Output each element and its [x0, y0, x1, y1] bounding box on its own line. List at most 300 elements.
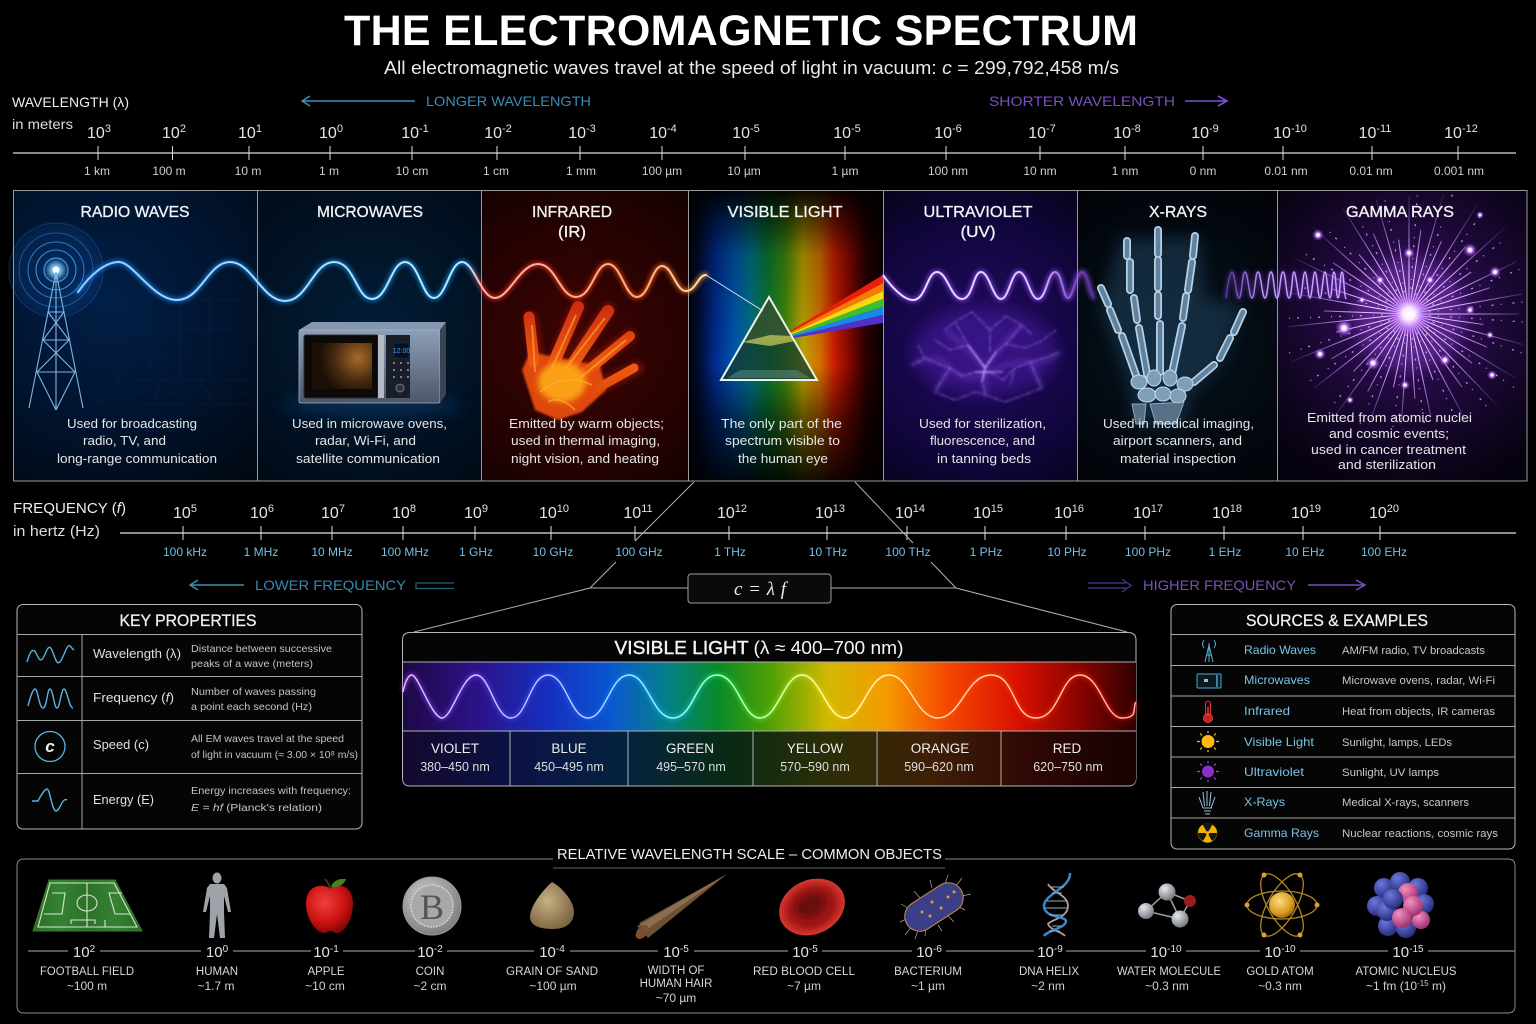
wavelength exponents: 10 — [1359, 125, 1376, 142]
object: human: ~1.7 m — [197, 979, 235, 993]
subtitle: All electromagnetic waves travel at the speed of light in vacuum: c = 299,792,458 m/s — [384, 58, 1119, 78]
row: wavelength: Distance between successive — [191, 643, 332, 655]
heading: SOURCES & EXAMPLES — [1246, 612, 1428, 630]
wavelength exponents: 0 — [337, 123, 343, 135]
row: ultraviolet — [1197, 761, 1440, 782]
wave: gamma rays — [1226, 272, 1346, 298]
row: frequency: Frequency ( f) — [93, 691, 174, 705]
icon: gamma burst — [1285, 192, 1534, 428]
object: bacterium: BACTERIUM — [894, 966, 962, 978]
spectrum band panels — [9, 190, 1534, 481]
frequency exponents: 13 — [833, 503, 845, 515]
frequency units — [163, 545, 1407, 559]
row: visible light — [1197, 731, 1453, 752]
frequency exponents: 10 — [464, 505, 482, 522]
object: DNA helix: DNA HELIX — [1019, 966, 1079, 978]
arrow: lower frequency — [190, 577, 454, 593]
object: red blood cell: -5 — [809, 944, 818, 955]
color range cells: 450–495 nm — [534, 760, 604, 774]
frequency units: 10 MHz — [311, 545, 353, 559]
object: football field: FOOTBALL FIELD — [40, 966, 134, 978]
heading: MICROWAVES — [317, 204, 423, 221]
object: bacterium — [894, 875, 971, 993]
icon: x-ray hand — [1101, 230, 1243, 425]
wavelength exponents: 10 — [484, 125, 502, 142]
frequency exponents: 10 — [557, 503, 569, 515]
panel: ultraviolet — [883, 190, 1077, 481]
row: gamma rays: Nuclear reactions, cosmic rays — [1342, 828, 1499, 840]
object: bacterium: 10 — [916, 944, 933, 961]
object: red blood cell — [753, 868, 856, 993]
wavelength exponents: 3 — [105, 123, 111, 135]
arrow: higher frequency — [1088, 577, 1365, 593]
object: coin — [403, 877, 461, 993]
panel: radio waves — [9, 190, 258, 481]
row: x-rays — [1199, 791, 1470, 814]
frequency axis label: in hertz (Hz) — [13, 524, 100, 540]
heading: ULTRAVIOLET — [924, 204, 1033, 221]
description: Used for broadcasting — [67, 416, 197, 431]
description: airport scanners, and — [1113, 433, 1242, 448]
description: long-range communication — [57, 451, 217, 466]
description: the human eye — [738, 451, 828, 466]
wavelength units: 1 µm — [832, 164, 858, 178]
row: energy: Energy (E) — [93, 793, 154, 807]
frequency axis label: FREQUENCY ( f) — [13, 501, 126, 517]
object: human hair — [633, 874, 727, 1005]
row: gamma rays — [1198, 823, 1499, 842]
row: microwaves: Microwaves — [1244, 673, 1310, 687]
frequency exponents: 10 — [815, 505, 833, 522]
panel: microwaves — [258, 190, 481, 481]
icon: prism — [706, 275, 817, 380]
frequency exponents: 16 — [1072, 503, 1084, 515]
row: wavelength — [27, 643, 332, 670]
wavelength units: 1 mm — [566, 164, 596, 178]
object: human hair: WIDTH OF — [648, 965, 704, 977]
wavelength units: 10 cm — [396, 164, 428, 178]
color range cells: GREEN — [666, 741, 714, 756]
wavelength units: 1 m — [319, 164, 339, 178]
wavelength exponents: -5 — [851, 123, 861, 135]
object: grain of sand: GRAIN OF SAND — [506, 966, 598, 978]
description: Used in medical imaging, — [1103, 416, 1254, 431]
icon: thermal hand — [522, 306, 637, 420]
row: radio waves: Radio Waves — [1244, 643, 1316, 657]
formula box — [688, 574, 831, 603]
wavelength units: 0.001 nm — [1434, 164, 1484, 178]
object: human: HUMAN — [196, 966, 238, 978]
wavelength axis label: WAVELENGTH (λ) — [12, 94, 129, 110]
heading: VISIBLE LIGHT — [728, 204, 843, 221]
color range cells: 590–620 nm — [904, 760, 974, 774]
frequency exponents: 10 — [173, 505, 191, 522]
frequency units: 100 PHz — [1125, 545, 1171, 559]
wavelength scale line — [13, 146, 1516, 160]
row: energy: Energy increases with frequency: — [191, 785, 351, 797]
object: coin: ~2 cm — [413, 979, 447, 993]
wavelength axis — [12, 93, 1516, 178]
wavelength exponents: -1 — [419, 123, 429, 135]
object: coin: B — [420, 887, 444, 927]
row: wavelength: Wavelength (λ) — [93, 647, 181, 661]
object: human: 0 — [223, 944, 229, 955]
row: frequency: Number of waves passing — [191, 686, 316, 698]
frequency exponents: 10 — [1212, 505, 1230, 522]
description: fluorescence, and — [930, 433, 1035, 448]
object: human — [196, 872, 238, 993]
wavelength exponents: 10 — [1113, 125, 1131, 142]
frequency exponents: 14 — [913, 503, 925, 515]
color range cells: 495–570 nm — [656, 760, 726, 774]
object: red blood cell: RED BLOOD CELL — [753, 966, 856, 978]
description: used in thermal imaging, — [511, 433, 660, 448]
description: and sterilization — [1338, 457, 1436, 472]
frequency units: 1 MHz — [244, 545, 278, 559]
panel outline and dividers — [14, 190, 1527, 481]
wavelength exponents: 10 — [833, 125, 851, 142]
object: football field: 10 — [73, 944, 90, 961]
object: red blood cell: ~7 µm — [787, 979, 821, 993]
wavelength exponents: 10 — [162, 125, 180, 142]
frequency exponents: 10 — [973, 505, 991, 522]
wavelength exponents: 10 — [649, 125, 667, 142]
frequency exponents: 10 — [717, 505, 735, 522]
wavelength units: 100 µm — [642, 164, 682, 178]
wavelength exponents: 10 — [934, 125, 952, 142]
frequency units: 1 THz — [714, 545, 746, 559]
object: atomic nucleus: 10 — [1392, 944, 1409, 961]
arrow: lower frequency: LOWER FREQUENCY — [255, 577, 407, 593]
frequency exponents: 8 — [410, 503, 416, 515]
object: DNA helix: -9 — [1054, 944, 1063, 955]
frequency exponents: 5 — [191, 503, 197, 515]
object: coin: -2 — [434, 944, 443, 955]
panel: relative wavelength scale — [17, 847, 1515, 1013]
frequency axis label — [13, 501, 126, 540]
description — [509, 416, 664, 466]
frequency exponents — [173, 503, 1399, 522]
frequency exponents: 10 — [895, 505, 913, 522]
row: frequency: a point each second (Hz) — [191, 701, 312, 713]
heading: X-RAYS — [1149, 204, 1207, 221]
icon: microwave oven — [299, 322, 446, 403]
description — [721, 416, 842, 466]
description: Used in microwave ovens, — [292, 416, 447, 431]
wavelength exponents: 10 — [1273, 125, 1291, 142]
row: speed: Speed (c) — [93, 738, 149, 752]
frequency units: 10 THz — [809, 545, 847, 559]
row: x-rays: Medical X-rays, scanners — [1342, 797, 1470, 809]
wavelength units: 1 cm — [483, 164, 509, 178]
description: night vision, and heating — [511, 451, 659, 466]
frequency exponents: 10 — [1133, 505, 1151, 522]
object: football field — [33, 880, 142, 993]
wavelength exponents: 10 — [401, 125, 419, 142]
object: human: 10 — [206, 944, 223, 961]
frequency units: 1 PHz — [970, 545, 1002, 559]
object: atomic nucleus: m) — [1429, 979, 1446, 993]
object: coin: 10 — [417, 944, 434, 961]
object: atomic nucleus: ATOMIC NUCLEUS — [1356, 966, 1457, 978]
description: Emitted by warm objects; — [509, 416, 664, 431]
icon: rainbow beam — [790, 275, 883, 338]
frequency exponents: 10 — [1369, 505, 1387, 522]
row: energy: E = hf (Planck's relation) — [191, 802, 322, 814]
heading: GAMMA RAYS — [1346, 204, 1454, 221]
frequency units: 100 GHz — [615, 545, 663, 559]
frequency units: 1 EHz — [1209, 545, 1241, 559]
wavelength exponents: -4 — [667, 123, 677, 135]
wavelength units: 100 nm — [928, 164, 968, 178]
color range cells: BLUE — [551, 741, 587, 756]
frequency exponents: 10 — [392, 505, 410, 522]
color range cells: VIOLET — [431, 741, 479, 756]
row: infrared: Heat from objects, IR cameras — [1342, 706, 1496, 718]
wavelength exponents: -7 — [1046, 123, 1056, 135]
icon: UV fluorescence pattern — [912, 308, 1060, 402]
wavelength exponents: -8 — [1131, 123, 1141, 135]
color range cells: RED — [1053, 741, 1081, 756]
row: ultraviolet: Ultraviolet — [1244, 765, 1305, 779]
row: infrared — [1204, 701, 1496, 722]
object: bacterium: -6 — [933, 944, 942, 955]
object: gold atom: 10 — [1264, 944, 1281, 961]
object: atomic nucleus: -15 — [1417, 979, 1429, 988]
description: in tanning beds — [937, 451, 1032, 466]
object: grain of sand: 10 — [539, 944, 556, 961]
frequency units: 1 GHz — [459, 545, 493, 559]
wavelength units: 10 m — [235, 164, 261, 178]
description: satellite communication — [296, 451, 440, 466]
row: energy — [32, 785, 351, 814]
object: apple — [305, 879, 353, 993]
object: apple: APPLE — [307, 966, 345, 978]
wavelength exponents: -12 — [1462, 123, 1478, 135]
object: atomic nucleus: -15 — [1409, 944, 1424, 955]
object: grain of sand — [506, 882, 598, 993]
arrow: longer wavelength: LONGER WAVELENGTH — [426, 93, 591, 109]
description: Used for sterilization, — [919, 416, 1046, 431]
wavelength units: 100 m — [152, 164, 186, 178]
zoom connector lines — [414, 482, 1127, 632]
wavelength axis label — [12, 94, 129, 132]
frequency exponents: 12 — [735, 503, 747, 515]
row: visible light: Sunlight, lamps, LEDs — [1342, 737, 1453, 749]
heading: INFRARED — [532, 204, 612, 221]
row: wavelength: peaks of a wave (meters) — [191, 658, 313, 670]
row: speed — [35, 732, 358, 762]
frequency exponents: 19 — [1309, 503, 1321, 515]
wavelength exponents: 10 — [732, 125, 750, 142]
wavelength exponents: 10 — [87, 125, 105, 142]
frequency exponents: 10 — [623, 505, 641, 522]
wavelength units: 10 µm — [727, 164, 761, 178]
description — [292, 416, 447, 466]
spectrum band with wave — [403, 662, 1136, 731]
heading: RADIO WAVES — [80, 204, 190, 221]
color range cells: 380–450 nm — [420, 760, 490, 774]
formula box: c = λ f — [734, 579, 789, 600]
heading: KEY PROPERTIES — [120, 612, 256, 630]
row: infrared: Infrared — [1244, 704, 1290, 718]
title: THE ELECTROMAGNETIC SPECTRUM — [344, 7, 1138, 55]
row: gamma rays: Gamma Rays — [1244, 826, 1319, 840]
description: material inspection — [1120, 451, 1236, 466]
object: atomic nucleus — [1356, 872, 1457, 993]
wavelength exponents: -6 — [952, 123, 962, 135]
frequency units: 100 EHz — [1361, 545, 1407, 559]
object: water molecule: -10 — [1167, 944, 1182, 955]
description — [1307, 410, 1472, 472]
arrow: longer wavelength — [302, 93, 591, 109]
object: football field: ~100 m — [67, 979, 107, 993]
panel: gamma rays — [1277, 190, 1534, 481]
object: apple: 10 — [313, 944, 330, 961]
description — [919, 416, 1046, 466]
row: x-rays: X-Rays — [1244, 795, 1285, 809]
panel: infrared: (IR) — [558, 224, 586, 241]
icon: microwave oven: 12:00 — [393, 348, 410, 355]
frequency exponents: 17 — [1151, 503, 1163, 515]
object: human hair: HUMAN HAIR — [640, 978, 712, 990]
frequency units: 100 kHz — [163, 545, 207, 559]
object: water molecule: WATER MOLECULE — [1117, 966, 1221, 978]
heading: VISIBLE LIGHT (λ ≈ 400–700 nm) — [614, 637, 904, 658]
panel: visible light — [688, 190, 883, 481]
wavelength exponents: 2 — [180, 123, 186, 135]
object: DNA helix: 10 — [1037, 944, 1054, 961]
description: radar, Wi-Fi, and — [315, 433, 416, 448]
description — [57, 416, 217, 466]
object: gold atom: ~0.3 nm — [1258, 979, 1302, 993]
frequency units: 10 PHz — [1047, 545, 1087, 559]
description: Emitted from atomic nuclei — [1307, 410, 1472, 425]
wavelength units: 0.01 nm — [1264, 164, 1308, 178]
description: The only part of the — [721, 416, 842, 431]
object: DNA helix — [1019, 873, 1079, 993]
object: coin: COIN — [416, 966, 444, 978]
wavelength exponents: -3 — [586, 123, 596, 135]
row: microwaves — [1197, 673, 1495, 688]
description: and cosmic events; — [1329, 426, 1449, 441]
description: used in cancer treatment — [1311, 442, 1466, 457]
heading: RELATIVE WAVELENGTH SCALE – COMMON OBJECTS — [557, 847, 942, 863]
panel: sources and examples — [1171, 604, 1515, 849]
object: gold atom: -10 — [1281, 944, 1296, 955]
object: grain of sand: -4 — [556, 944, 565, 955]
frequency units: 10 EHz — [1285, 545, 1325, 559]
description: spectrum visible to — [725, 433, 840, 448]
frequency units: 100 MHz — [381, 545, 429, 559]
frequency exponents: 11 — [641, 503, 653, 515]
wavelength exponents: 10 — [568, 125, 586, 142]
wavelength exponents: -2 — [502, 123, 512, 135]
row: ultraviolet: Sunlight, UV lamps — [1342, 767, 1440, 779]
color range cells: ORANGE — [911, 741, 969, 756]
color range cells: 570–590 nm — [780, 760, 850, 774]
wavelength exponents: 10 — [1444, 125, 1462, 142]
row: microwaves: Microwave ovens, radar, Wi-Fi — [1342, 675, 1495, 687]
wavelength units: 10 nm — [1023, 164, 1057, 178]
frequency exponents: 10 — [321, 505, 339, 522]
object: gold atom — [1244, 868, 1320, 993]
frequency exponents: 10 — [1291, 505, 1309, 522]
wavelength exponents: 1 — [256, 123, 262, 135]
wave: ultraviolet — [883, 272, 1095, 300]
object: gold atom: GOLD ATOM — [1246, 966, 1314, 978]
panel: x-rays — [1077, 190, 1277, 481]
color range cells: YELLOW — [787, 741, 843, 756]
wavelength units — [84, 164, 1484, 178]
row: speed: of light in vacuum (≈ 3.00 × 10⁸ m/s) — [191, 749, 358, 761]
frequency scale line — [120, 526, 1516, 540]
wavelength exponents: 10 — [238, 125, 256, 142]
frequency exponents: 6 — [268, 503, 274, 515]
object: red blood cell: 10 — [792, 944, 809, 961]
frequency exponents: 9 — [482, 503, 488, 515]
wavelength exponents: 10 — [1191, 125, 1209, 142]
frequency exponents: 10 — [1054, 505, 1072, 522]
frequency exponents: 15 — [991, 503, 1003, 515]
icon: radio tower with rings — [9, 223, 103, 410]
object: bacterium: ~1 µm — [911, 979, 945, 993]
wavelength exponents: 10 — [319, 125, 337, 142]
row: radio waves — [1202, 640, 1486, 662]
panel: key properties — [17, 604, 362, 829]
arrow: shorter wavelength: SHORTER WAVELENGTH — [989, 93, 1175, 109]
row: radio waves: AM/FM radio, TV broadcasts — [1342, 645, 1486, 657]
scale line — [28, 950, 1515, 952]
object: human hair: -5 — [680, 944, 689, 955]
color range cells: 620–750 nm — [1033, 760, 1103, 774]
row: speed: c — [45, 737, 55, 756]
frequency exponents: 10 — [250, 505, 268, 522]
panel: visible light detail — [402, 632, 1136, 786]
wavelength units: 0 nm — [1190, 164, 1216, 178]
frequency exponents: 18 — [1230, 503, 1242, 515]
wavelength units: 0.01 nm — [1349, 164, 1393, 178]
wavelength exponents: -5 — [750, 123, 760, 135]
frequency exponents: 20 — [1387, 503, 1399, 515]
object: human hair: ~70 µm — [656, 991, 696, 1005]
description — [1103, 416, 1254, 466]
object: apple: ~10 cm — [305, 979, 345, 993]
wavelength exponents: -10 — [1291, 123, 1307, 135]
wavelength exponents: -11 — [1376, 123, 1391, 135]
panel: infrared — [481, 190, 688, 481]
panel: ultraviolet: (UV) — [960, 224, 996, 241]
frequency units: 10 GHz — [533, 545, 573, 559]
frequency axis — [13, 501, 1516, 593]
frequency exponents: 10 — [539, 505, 557, 522]
object: football field: 2 — [90, 944, 96, 955]
wavelength units: 1 km — [84, 164, 110, 178]
color range cells — [403, 662, 1136, 786]
object: water molecule — [1117, 884, 1221, 993]
object: water molecule: 10 — [1150, 944, 1167, 961]
wavelength exponents — [87, 123, 1478, 142]
object: water molecule: ~0.3 nm — [1145, 979, 1189, 993]
row: visible light: Visible Light — [1244, 735, 1315, 749]
frequency units: 100 THz — [885, 545, 931, 559]
frequency exponents: 7 — [339, 503, 345, 515]
wavelength axis label: in meters — [12, 116, 73, 132]
object: DNA helix: ~2 nm — [1031, 979, 1065, 993]
row: frequency — [28, 686, 316, 713]
object: apple: -1 — [330, 944, 339, 955]
description: radio, TV, and — [83, 433, 166, 448]
